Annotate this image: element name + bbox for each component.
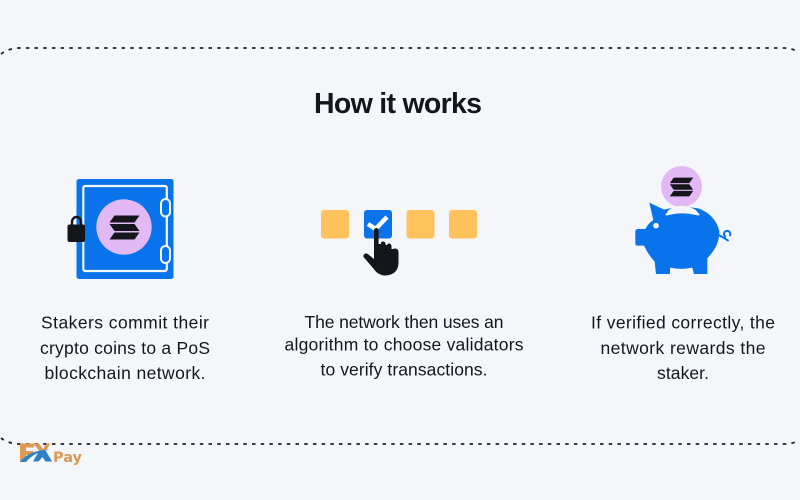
text: step 2: The network then uses an (304, 312, 504, 332)
icon: safe with coin and lock (68, 179, 174, 279)
logo: FXPay: Pay (53, 450, 82, 466)
text: step 3: staker. (657, 363, 709, 383)
text: step 1 (40, 312, 210, 383)
title: How it works (314, 88, 482, 120)
text: step 1: blockchain network. (44, 363, 206, 383)
text: step 2: algorithm to choose validators (284, 334, 524, 354)
icon: validator selection squares with pointer hand (321, 210, 477, 276)
text: step 2 (284, 312, 524, 380)
text: step 2: to verify transactions. (320, 360, 488, 380)
text: step 3: network rewards the (600, 338, 766, 358)
text: step 3 (591, 312, 775, 383)
logo: FXPay (20, 444, 82, 466)
text: step 3: If verified correctly, the (591, 312, 775, 332)
icon: piggy bank with coin (635, 166, 730, 274)
text: step 1: Stakers commit their (41, 312, 209, 332)
text: step 1: crypto coins to a PoS (40, 338, 210, 358)
